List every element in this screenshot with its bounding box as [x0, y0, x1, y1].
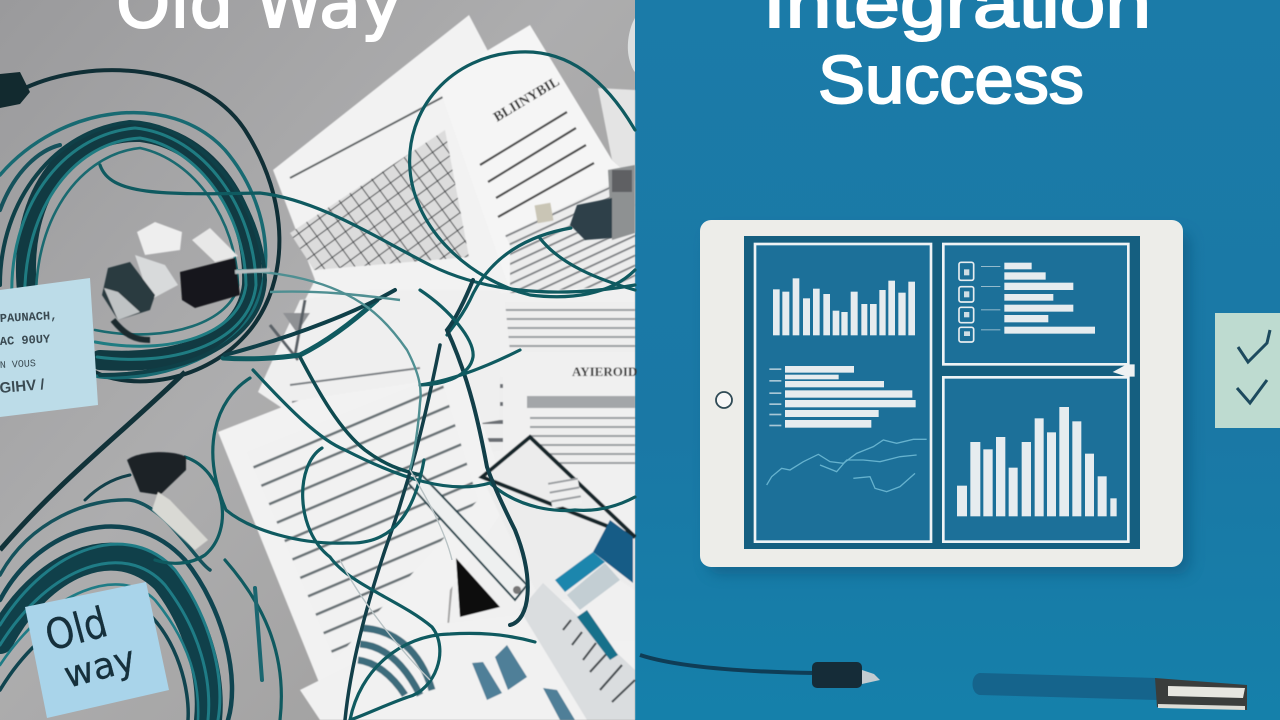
cables: thin tangled wires: [100, 52, 635, 720]
line chart: [767, 439, 927, 492]
sticky note: old way: way: [60, 638, 140, 697]
vertical bar chart: [957, 407, 1117, 516]
marker: white notch: [1113, 364, 1135, 377]
screen: [744, 236, 1140, 549]
panel: integration success background: [635, 0, 1280, 720]
paper: lower right sheet with heading: [440, 285, 637, 720]
sticky note: upper blue note: AC 90UY: [0, 332, 51, 349]
sticky note: upper blue note: GlHV /: [0, 376, 46, 397]
scattered papers: [218, 15, 637, 720]
horizontal bar chart: [769, 366, 916, 428]
cables: pale wires: [340, 470, 452, 680]
tablet shadow: [708, 232, 1190, 574]
icon: right plug: [535, 165, 635, 240]
sticky note: upper blue note: [0, 278, 98, 417]
paper: lower right sheet with heading: AYIEROID: [572, 364, 637, 379]
panel: old way background: [0, 0, 635, 720]
chart marks: blue blocks: [472, 645, 575, 720]
heading: integration success: [763, 0, 1151, 118]
paper: torn middle sheet: [258, 290, 500, 440]
paper: back sheet with grid: [273, 15, 540, 330]
icon: top left plug: [0, 72, 30, 108]
cables: lower coil: [0, 475, 232, 720]
paper: bottom sheet: [300, 600, 635, 720]
horizontal bars: [981, 263, 1095, 334]
icon: lower plug and connector: [127, 452, 208, 550]
sticky note: old way: [25, 582, 169, 718]
tablet body: [700, 220, 1183, 567]
device: white tool strip: [408, 473, 635, 720]
tablet dashboard: [700, 220, 1183, 567]
sticky note: upper blue note: N VOUS: [0, 359, 36, 372]
pen: [972, 673, 1247, 710]
paper: form sheet with heading: BLIINYBIL: [491, 74, 562, 125]
heading: integration success: Success: [818, 42, 1084, 118]
paper: right edge sheet: [598, 88, 635, 180]
cables: light bare wires: [235, 270, 421, 470]
paper: middle right table sheet: [510, 232, 635, 300]
panel: left charts: [755, 244, 931, 542]
panel: bottom right chart: [943, 377, 1128, 542]
chart marks: curved stripes: [358, 628, 432, 695]
paper: form sheet with heading: [440, 25, 635, 290]
panel: top right chart: [943, 244, 1128, 364]
icon: home button: [716, 392, 732, 408]
paper: lower left striped sheet: [218, 375, 510, 720]
device: black tablet frame: [482, 437, 635, 640]
icon: centre plug and connector: [102, 222, 270, 340]
paper: corner sliver: [628, 18, 635, 72]
sticky note: old way: Old: [40, 597, 112, 661]
vertical bar chart: [773, 278, 915, 335]
cables: long diagonal: [0, 372, 185, 550]
sticky note: green checks: [1215, 313, 1280, 428]
icon column: [959, 262, 974, 342]
cable and plug on desk: [640, 655, 880, 688]
cables: upper coil: [0, 70, 279, 381]
device: black screen: [456, 558, 500, 617]
sticky note: upper blue note: PAUNACH,: [0, 309, 58, 326]
